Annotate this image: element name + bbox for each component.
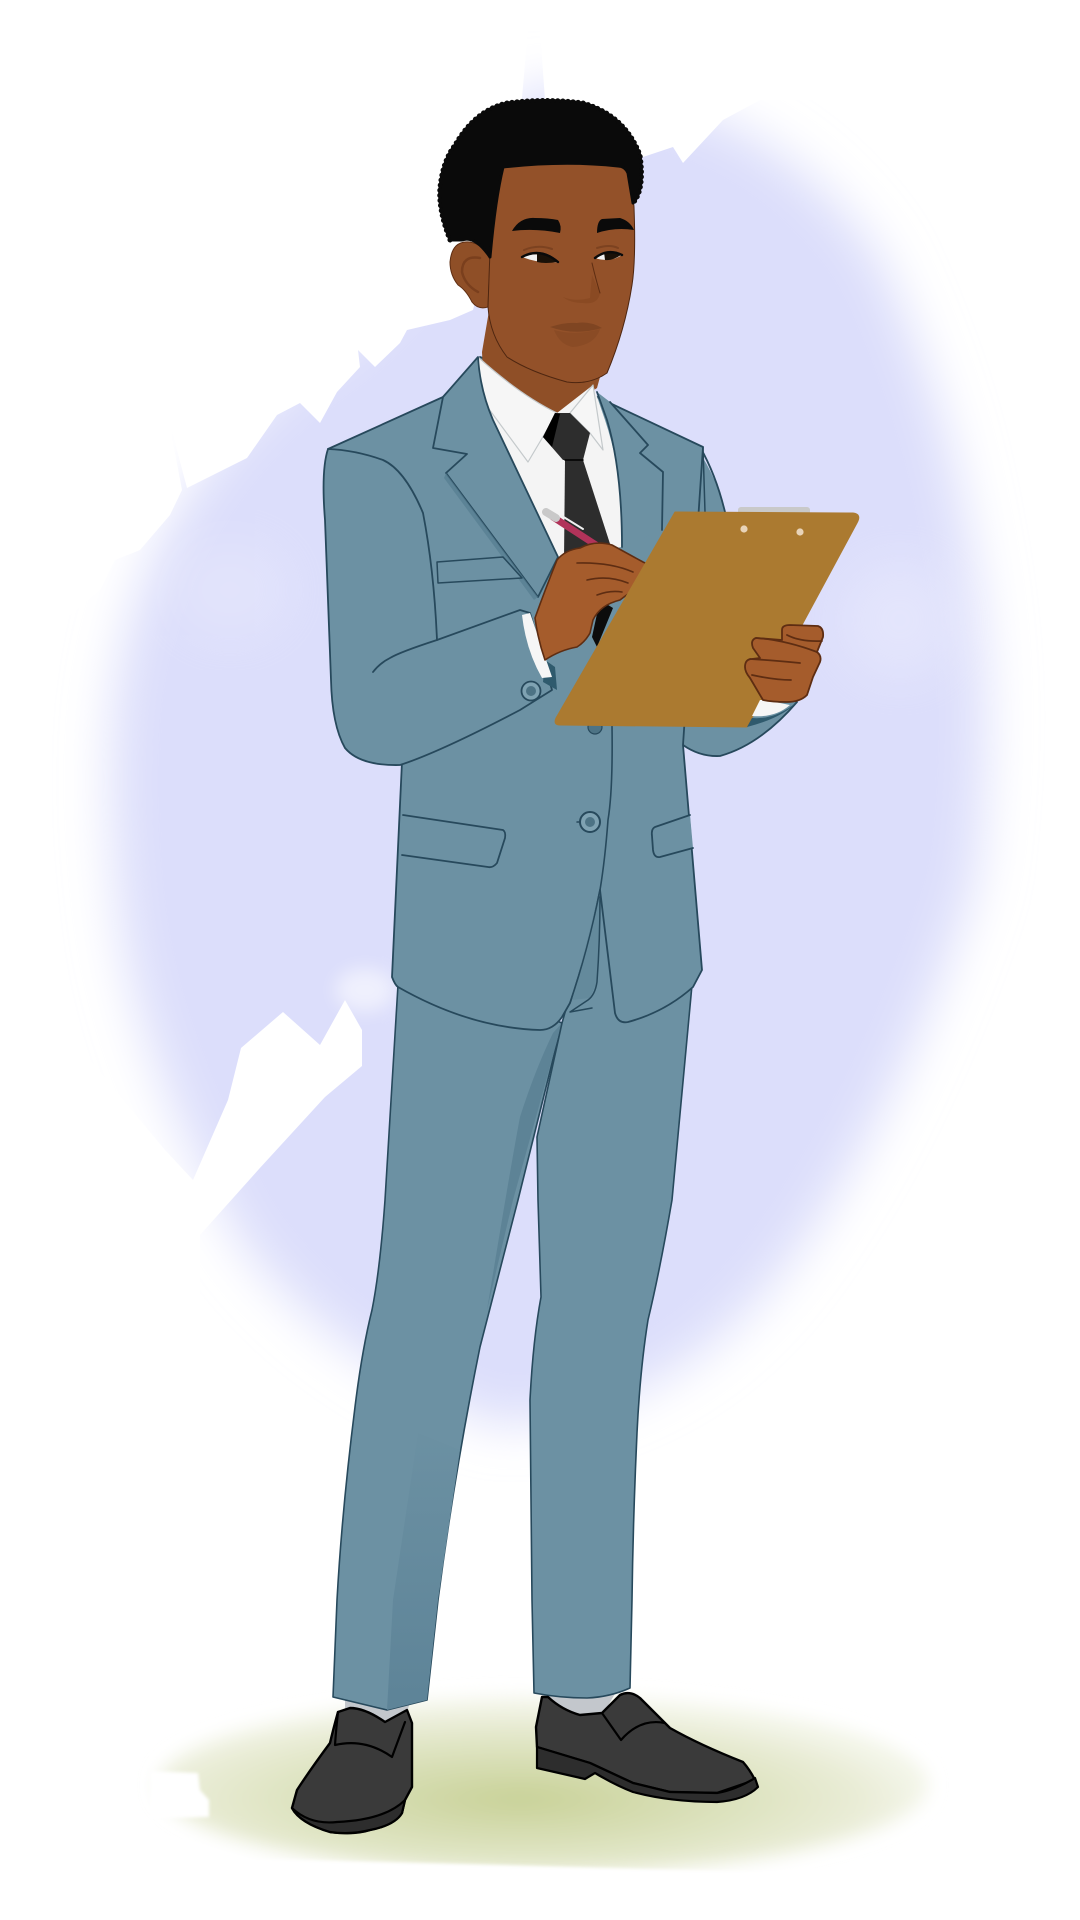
nose [563, 263, 600, 303]
ear [450, 242, 490, 308]
right sleeve opening [747, 702, 797, 727]
right shoulder seam [703, 447, 705, 512]
sleeve inner lining [543, 660, 557, 690]
shirt cuff left [522, 613, 552, 678]
right sock [545, 1685, 620, 1718]
waist insert lines [570, 890, 600, 1012]
front sleeve [324, 449, 557, 765]
waist pocket right [652, 815, 693, 857]
sleeve button [522, 682, 540, 700]
sleeve fold line [373, 640, 437, 672]
left trouser leg [333, 985, 562, 1710]
neck [482, 305, 610, 415]
hidden button under clipboard [588, 720, 602, 734]
jacket rear sleeve [683, 680, 797, 756]
holding hand [745, 625, 823, 702]
mouth [550, 323, 602, 347]
lapel shadow [444, 473, 538, 600]
background: ground patch [140, 1697, 940, 1900]
right lapel fill [597, 392, 663, 547]
jacket rear shoulder [670, 440, 740, 700]
eyes [522, 246, 622, 263]
jacket torso [328, 357, 703, 1030]
eyebrows [512, 218, 634, 233]
breast pocket [437, 557, 522, 583]
pen [546, 512, 596, 545]
hair [440, 100, 641, 257]
left lapel [433, 357, 558, 597]
inner thigh shade [487, 1023, 562, 1310]
right lapel lines [597, 392, 663, 547]
figure [292, 100, 859, 1833]
left shoe [292, 1708, 412, 1833]
clipboard [555, 507, 859, 727]
tie [543, 413, 613, 647]
right trouser leg [530, 890, 692, 1698]
jacket front edge [600, 725, 612, 890]
face [488, 160, 635, 383]
illustration: businessman with clipboard [94, 74, 1002, 1870]
right shirt cuff [752, 700, 790, 716]
trouser waist insert [572, 890, 600, 1000]
writing hand [535, 543, 660, 660]
background wash: lavender watercolor [112, 90, 985, 1425]
shirt [480, 370, 622, 557]
trousers [333, 890, 692, 1710]
waist pocket left [402, 815, 505, 867]
trouser crease shade [387, 1433, 460, 1710]
left socks [345, 1695, 412, 1730]
jacket button [577, 812, 600, 832]
shirt collar [478, 357, 603, 462]
right shoe [536, 1693, 758, 1802]
